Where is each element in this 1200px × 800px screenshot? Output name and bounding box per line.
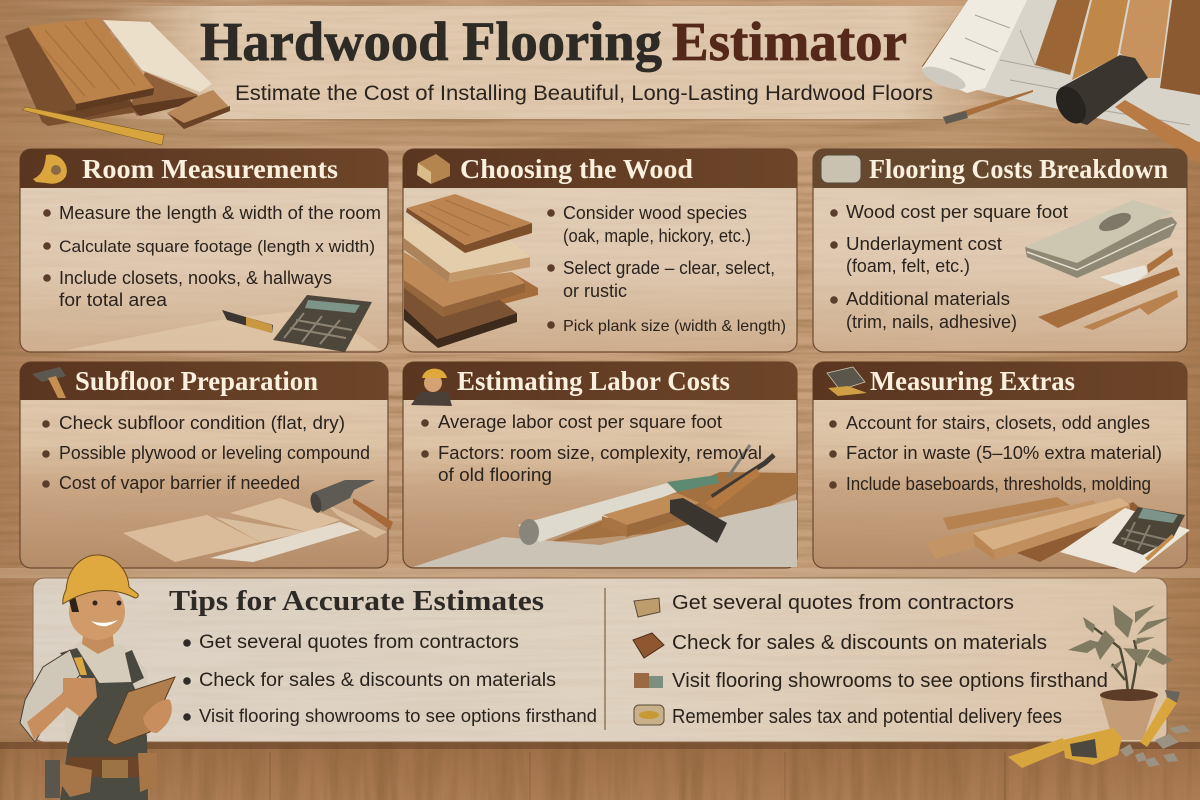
illustration: long plank (550, 472, 797, 542)
tool pouches (58, 763, 92, 797)
icon: tape roll (33, 155, 67, 184)
icon: tile box (633, 633, 664, 658)
left tips list: Check for sales & discounts on materials (199, 670, 556, 691)
illustration: blueprints, planks and mallet (920, 0, 1200, 163)
illustration: mallet and pry bar (670, 445, 774, 543)
panel: flooring costs breakdown (813, 149, 1187, 352)
title: Hardwood Flooring (200, 11, 662, 72)
illustration: rolled underlayment (518, 475, 719, 545)
illustration: notepad (1060, 508, 1190, 573)
bullet list: Consider wood species (563, 203, 747, 223)
overall straps (60, 648, 144, 690)
illustration: pencil (1145, 534, 1174, 561)
right tip 2: Check for sales & discounts on materials (672, 632, 1047, 654)
illustration: tape measure (1008, 728, 1122, 768)
right tip 1: Get several quotes from contractors (672, 592, 1014, 614)
bullet list: Wood cost per square foot (846, 202, 1068, 222)
floor plan drawing (67, 308, 380, 350)
heading: Choosing the Wood (460, 154, 693, 184)
illustration: wood boards (925, 497, 1140, 562)
panel: tips for accurate estimates (33, 578, 1167, 742)
forearm and fist (27, 678, 97, 740)
icon: marker (222, 310, 273, 333)
overalls (60, 682, 148, 800)
bullet list: for total area (59, 290, 168, 310)
bullet list: Factors: room size, complexity, removal (438, 443, 762, 463)
left tips list: Visit flooring showrooms to see options firsthand (199, 706, 597, 726)
left arm (20, 650, 80, 742)
subtitle: Estimate the Cost of Installing Beautiful, Long-Lasting Hardwood Floors (235, 82, 933, 105)
title accent word: Estimator (672, 11, 907, 72)
icon: wood block (417, 154, 450, 184)
panel: subfloor preparation (20, 362, 393, 568)
heading: Subfloor Preparation (75, 366, 318, 396)
icon: showroom (634, 673, 663, 688)
panel: room measurements (20, 149, 388, 352)
bullet list: Check subfloor condition (flat, dry) (59, 413, 345, 433)
icon: note (634, 598, 660, 617)
bullet list: Include closets, nooks, & hallways (59, 268, 332, 288)
bullet list (421, 412, 762, 485)
panel header (813, 149, 1187, 188)
icon: worker (411, 369, 452, 406)
hard hat (63, 555, 138, 604)
heading: Flooring Costs Breakdown (869, 154, 1168, 184)
panel header (813, 362, 1187, 400)
bullet list: Cost of vapor barrier if needed (59, 473, 300, 493)
right tip 3: Visit flooring showrooms to see options firsthand (672, 670, 1108, 692)
bullet list: Select grade – clear, select, (563, 258, 775, 278)
bullet list: or rustic (563, 281, 627, 301)
illustration: adhesive tube (1100, 248, 1173, 288)
bullet list: Possible plywood or leveling compound (59, 443, 370, 463)
bullet list: (foam, felt, etc.) (846, 256, 970, 276)
bullet list: Average labor cost per square foot (438, 412, 722, 432)
illustration: pencil and debris (1120, 690, 1190, 767)
panel: measuring extras (813, 362, 1190, 573)
panel: choosing the wood (403, 149, 797, 352)
panel: estimating labor costs (403, 362, 797, 568)
icon: tax receipt (634, 705, 664, 725)
bullet list: Account for stairs, closets, odd angles (846, 413, 1150, 433)
panel header (403, 149, 797, 188)
panel header (20, 149, 388, 188)
icon: calculator (827, 367, 867, 396)
illustration: wood block (602, 493, 700, 537)
bullet list (829, 413, 1162, 494)
heading: Estimating Labor Costs (457, 366, 730, 396)
icon: cash bundle (821, 155, 861, 183)
panel header (20, 362, 388, 400)
suspender (72, 657, 87, 675)
illustration: plank stack (404, 194, 538, 348)
left tips list: Get several quotes from contractors (199, 632, 519, 653)
illustration: stacked wood planks and ruler (5, 18, 230, 145)
heading: Room Measurements (82, 154, 338, 184)
illustration: potted plant (1068, 605, 1173, 740)
bullet list: of old flooring (438, 465, 552, 485)
bullet list: (oak, maple, hickory, etc.) (563, 226, 751, 246)
illustration: contractor with clipboard (20, 555, 175, 800)
illustration: underlayment sheets (123, 498, 387, 562)
left tips list (183, 632, 597, 726)
bullet list (43, 203, 381, 310)
bullet list: Factor in waste (5–10% extra material) (846, 443, 1162, 463)
tips heading: Tips for Accurate Estimates (169, 585, 544, 617)
right hand (143, 699, 172, 733)
icon: claw hammer (309, 480, 393, 530)
header banner (110, 6, 1010, 120)
bullet list: Additional materials (846, 289, 1010, 309)
panel header (403, 362, 797, 400)
shirt torso (62, 638, 148, 743)
right tip 4: Remember sales tax and potential delivery fees (672, 706, 1062, 728)
bullet list (830, 202, 1068, 332)
illustration: stack of cash (1025, 200, 1177, 278)
heading: Measuring Extras (870, 366, 1075, 396)
illustration: trim boards (1038, 267, 1180, 330)
bullet list: (trim, nails, adhesive) (846, 312, 1017, 332)
neck (82, 628, 114, 654)
bullet list (42, 413, 370, 493)
icon: hammer (32, 367, 66, 398)
clipboard (107, 677, 175, 745)
illustration: underlayment sheet (413, 500, 797, 567)
bullet list: Underlayment cost (846, 234, 1002, 254)
bullet list (547, 203, 786, 335)
bullet list: Measure the length & width of the room (59, 203, 381, 223)
tool belt (67, 757, 147, 777)
bullet list: Include baseboards, thresholds, molding (846, 474, 1151, 494)
bullet list: Pick plank size (width & length) (563, 318, 786, 335)
face (69, 584, 125, 640)
bullet list: Calculate square footage (length x width) (59, 237, 375, 256)
icon: calculator on notepad (1112, 507, 1185, 555)
icon: calculator (273, 295, 372, 352)
